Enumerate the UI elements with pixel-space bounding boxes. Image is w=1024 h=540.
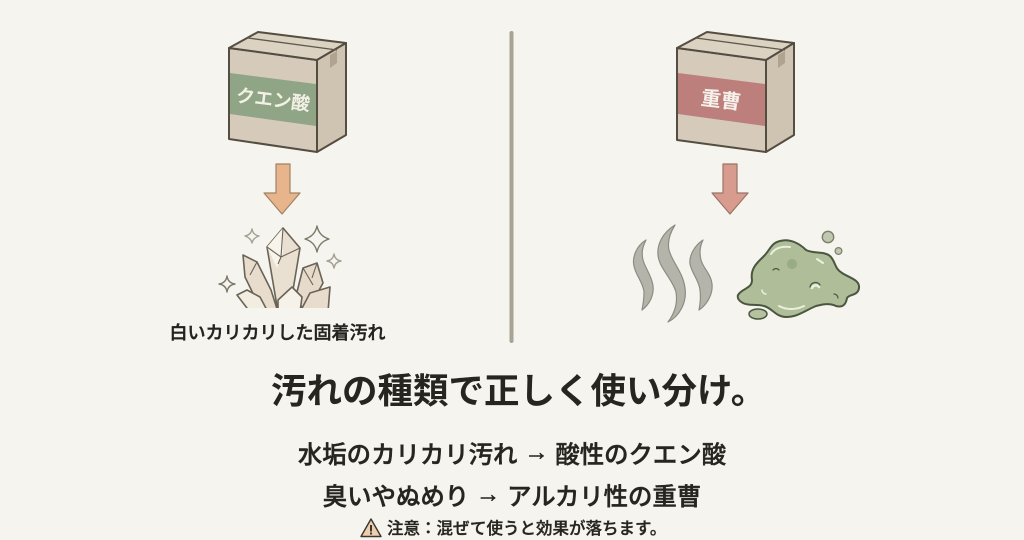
icon: slime puddle xyxy=(738,231,859,319)
panel: citric acid box xyxy=(229,32,346,152)
slime highlights xyxy=(762,247,838,309)
text: rule 2: 臭いやぬめり xyxy=(323,484,469,511)
text: caution note: 注意：混ぜて使うと効果が落ちます。 xyxy=(387,518,666,538)
caption: citric acid target: 白いカリカリした固着汚れ xyxy=(170,323,386,343)
divider xyxy=(510,31,514,343)
text: rule 1: 水垢のカリカリ汚れ xyxy=(298,442,517,469)
panel: baking soda box xyxy=(677,32,794,152)
arrow: citric acid xyxy=(264,164,300,214)
icon: warning triangle xyxy=(361,519,381,536)
text: rule 1: 酸性のクエン酸 xyxy=(555,442,726,469)
icon: odor wisps xyxy=(634,225,712,322)
title: 汚れの種類で正しく使い分け。 xyxy=(271,371,766,411)
arrow: baking soda xyxy=(712,164,748,214)
text: rule 2: → xyxy=(476,481,500,508)
text: rule 1: → xyxy=(524,439,549,466)
label: 重曹: 重曹 xyxy=(700,87,742,114)
text: rule 2: アルカリ性の重曹 xyxy=(507,484,701,511)
infographic canvas xyxy=(172,31,860,538)
icon: white crystals xyxy=(237,228,330,312)
icon: sparkles xyxy=(219,226,341,292)
label: クエン酸: クエン酸 xyxy=(235,85,312,114)
